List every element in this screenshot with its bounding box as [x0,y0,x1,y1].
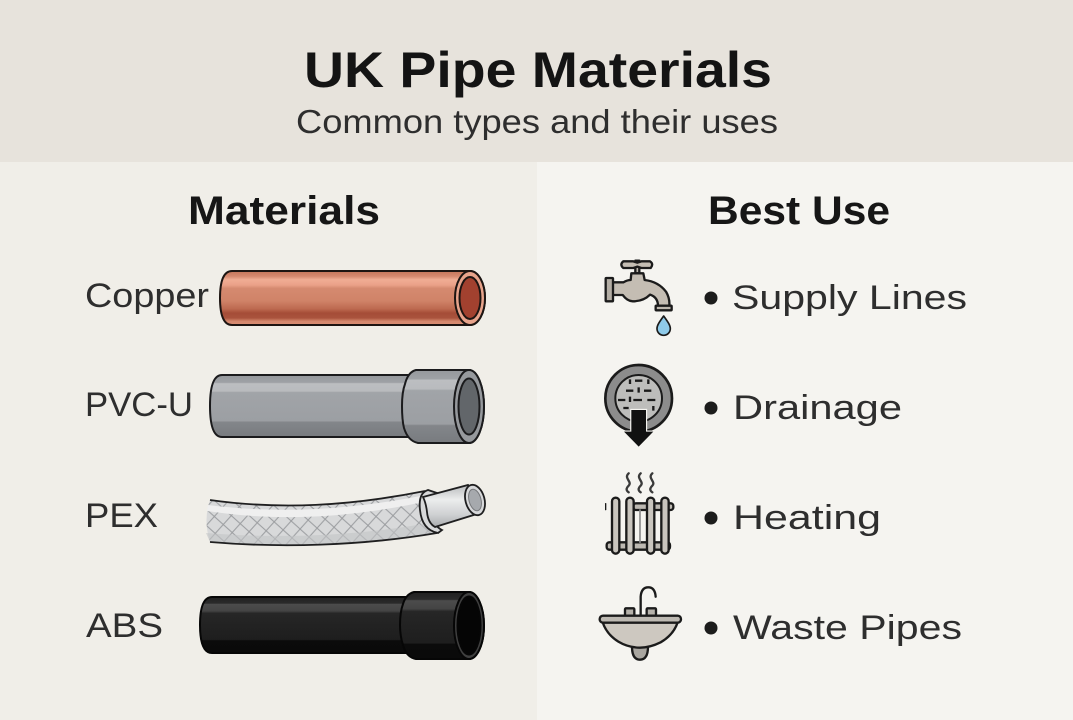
label: Copper: Copper [85,277,209,315]
pipe: PVC-U [210,370,484,443]
pipe: PEX braided [206,484,486,546]
label: ABS: ABS [86,607,163,645]
bullet and text: Heating: Heating [733,499,881,537]
heading: Materials: Materials [188,189,380,233]
bullet and text: Supply Lines: Supply Lines [732,279,967,317]
panel: materials background [0,162,537,720]
pipe: ABS [200,592,484,659]
icon: sink with tap [600,587,681,660]
bullet and text: Drainage [704,389,902,427]
label: PVC-U: PVC-U [85,386,193,424]
pipe: copper [220,271,485,325]
bullet and text: Waste Pipes: Waste Pipes [733,609,962,647]
title: UK Pipe Materials [304,42,772,98]
label: PEX: PEX [85,497,158,535]
bullet and text: Heating [704,499,881,537]
bullet and text: Drainage: Drainage [733,389,902,427]
icon: faucet with water drop [606,261,672,335]
subtitle: Common types and their uses [296,103,778,140]
panel: best use background [537,162,1073,720]
panel: header band [0,0,1073,162]
icon: floor drain with arrow [605,365,672,447]
heading: Best Use: Best Use [708,189,890,233]
icon: radiator with heat waves [606,473,673,554]
